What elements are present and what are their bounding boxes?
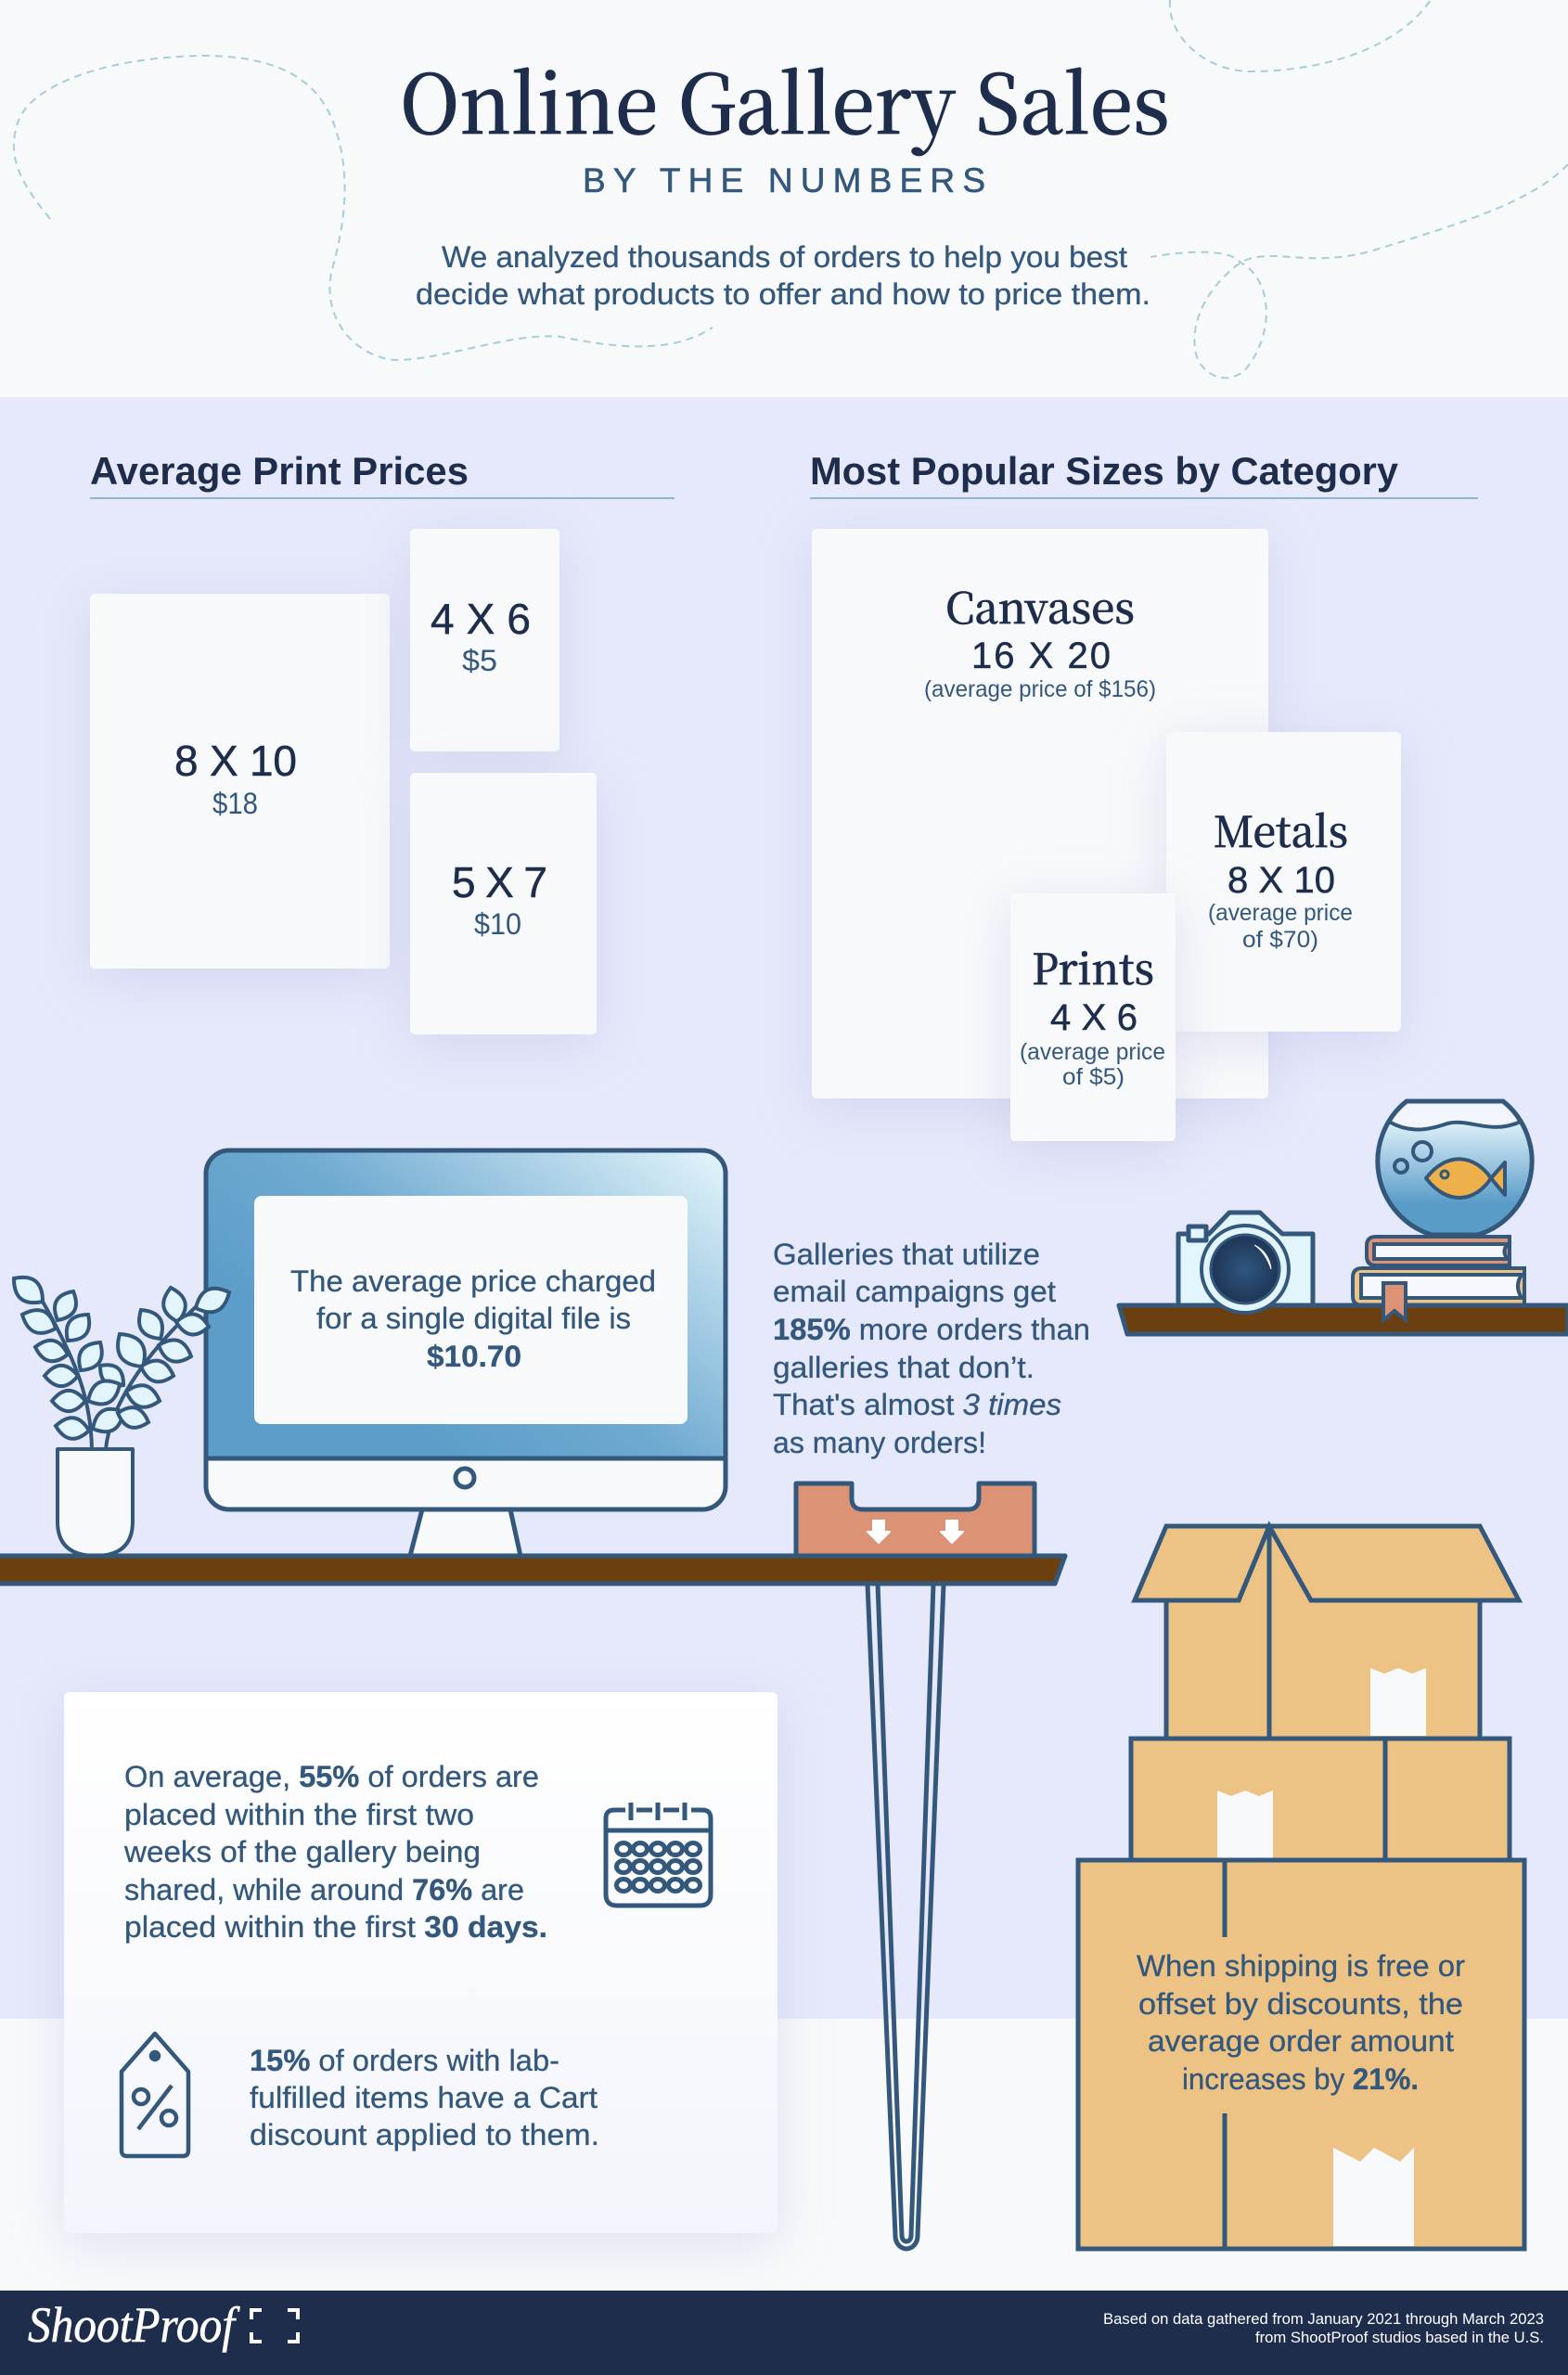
icon: price tag [122,2034,188,2156]
middle box [1131,1739,1510,1860]
text: cart discount [250,2044,599,2151]
card: metals: of $70) [1242,927,1318,953]
source note: from ShootProof studios based in the U.S. [1255,2329,1544,2346]
text: cart discount: 15% of orders with lab- [250,2044,559,2077]
card: canvases: 16 X 20 [971,635,1111,676]
panel: most popular sizes [810,449,1478,1141]
card: metals: (average price [1208,900,1353,926]
shelf with camera, books and fishbowl [1119,1101,1568,1334]
icon: fishbowl [1378,1101,1532,1235]
text: free shipping: average order amount [1148,2024,1454,2058]
text: order timing: shared, while around 76% are [124,1873,524,1906]
card: prints: of $5) [1062,1064,1125,1090]
card: 5x7 [410,773,597,1034]
intro text: We analyzed thousands of orders to help you best [442,240,1127,274]
source note [1103,2310,1544,2346]
card: 4x6 [410,529,559,751]
text: order timing: placed within the first 30 days. [124,1910,547,1944]
bookmark [1383,1283,1406,1320]
desk legs [868,1584,944,2249]
text: free shipping: increases by 21%. [1182,2062,1419,2096]
card: prints: 4 X 6 [1050,997,1137,1038]
card: 5x7: $10 [474,907,521,941]
monitor text [290,1265,656,1373]
text: email campaigns: as many orders! [773,1426,986,1459]
intro text [416,240,1150,311]
icon: books [1353,1237,1524,1305]
icon: calendar [606,1803,711,1906]
text: order timing [123,1760,547,1944]
card: canvases: Canvases [945,575,1135,636]
icon: inbox tray [796,1483,1035,1556]
text: email campaigns: email campaigns get [773,1275,1056,1308]
text: order timing: weeks of the gallery being [123,1835,481,1868]
text: email campaigns: Galleries that utilize [773,1238,1040,1271]
top box [1135,1526,1519,1739]
text: free shipping: When shipping is free or [1137,1949,1465,1983]
heading: most popular sizes: Most Popular Sizes by Category [810,449,1399,493]
monitor text: The average price charged [290,1265,656,1298]
card: 8x10 [90,594,390,969]
panel: order timing and discounts [64,1692,778,2233]
source note: Based on data gathered from January 2021 through March 2023 [1103,2310,1544,2328]
shelf board [1119,1305,1568,1334]
monitor text: $10.70 [427,1340,521,1373]
desk with monitor, plant and inbox [0,1150,1065,2249]
card: 8x10: $18 [212,787,258,820]
icon: plant [6,1269,234,1556]
boxes stack [1078,1526,1524,2249]
text: cart discount: discount applied to them. [250,2118,599,2151]
footer [0,2291,1568,2375]
card: metals: Metals [1214,799,1348,860]
card: 4x6: $5 [462,644,497,677]
card: prints: Prints [1032,936,1154,997]
text: email campaigns: 185% more orders than [773,1313,1090,1346]
monitor [206,1150,726,1556]
logo: ShootProof [28,2297,240,2353]
card: metals [1166,732,1401,1032]
text: email campaigns: galleries that don’t. [773,1351,1035,1384]
intro text: decide what products to offer and how to price them. [416,277,1150,311]
card: canvases [812,529,1268,1098]
bottom box [1078,1860,1524,2249]
card: 8x10: 8 X 10 [174,737,297,785]
text: cart discount: fulfilled items have a Cart [250,2081,598,2114]
card: prints [1010,893,1176,1141]
desk top [0,1556,1065,1584]
card: 5x7: 5 X 7 [452,858,547,906]
icon: camera [1178,1213,1313,1305]
card: prints: (average price [1020,1039,1165,1065]
card: canvases: (average price of $156) [924,676,1156,702]
card: 4x6: 4 X 6 [431,595,531,643]
text: free shipping [1137,1949,1465,2096]
heading: average print prices: Average Print Prices [90,449,469,493]
camera lens [1202,1226,1289,1313]
subtitle: BY THE NUMBERS [583,161,985,199]
text: email campaigns: That's almost 3 times [773,1388,1061,1421]
text: email campaigns [773,1238,1090,1459]
panel: average print prices [90,449,675,1034]
text: order timing: placed within the first two [124,1798,474,1831]
card: metals: 8 X 10 [1227,860,1335,901]
title: Online Gallery Sales [400,41,1170,158]
text: order timing: On average, 55% of orders are [124,1760,539,1793]
text: free shipping: offset by discounts, the [1138,1987,1463,2021]
monitor text: for a single digital file is [316,1302,631,1335]
